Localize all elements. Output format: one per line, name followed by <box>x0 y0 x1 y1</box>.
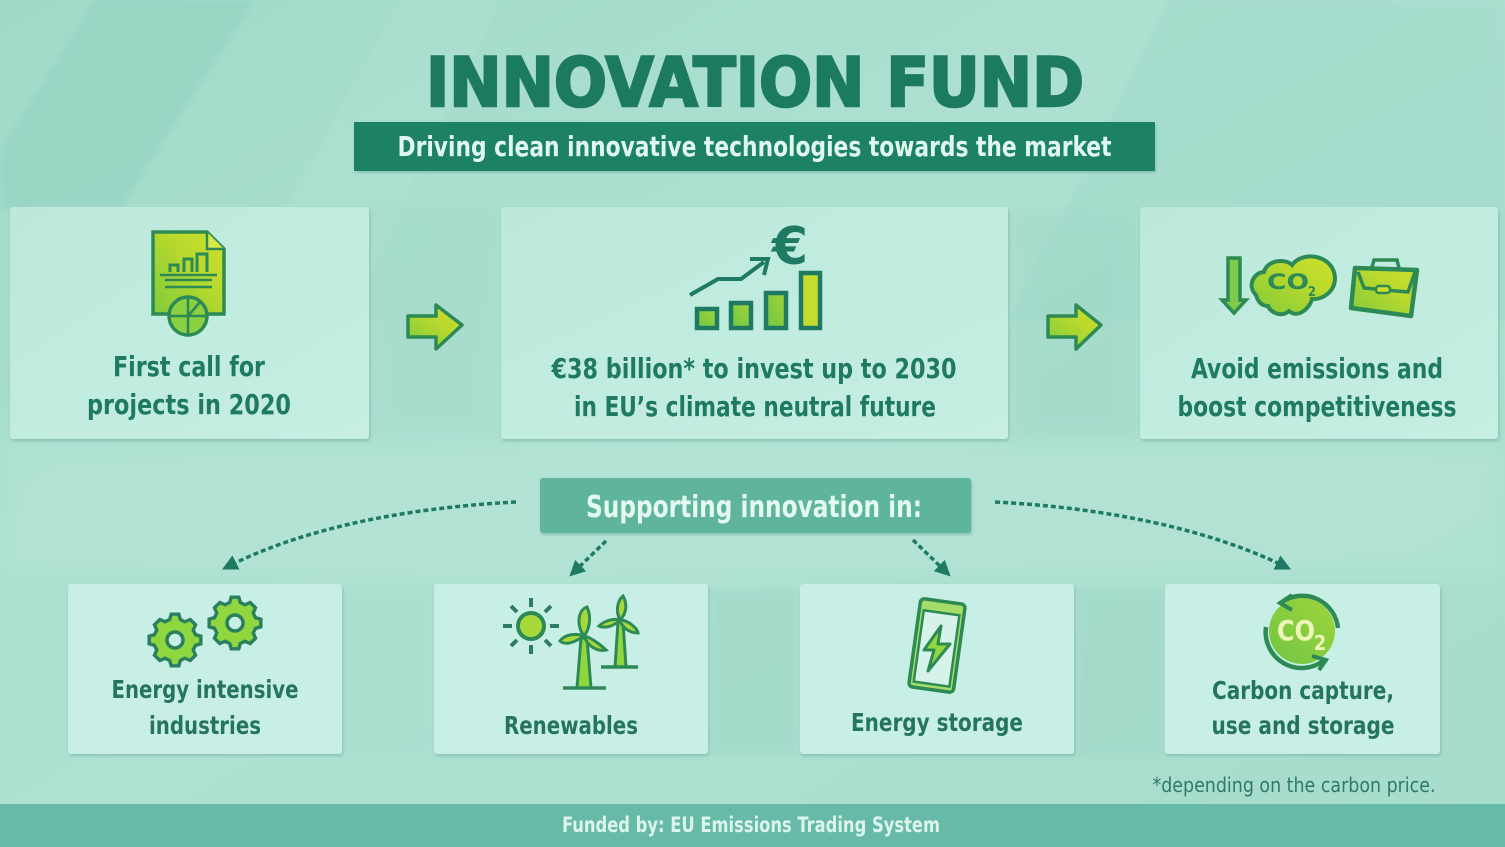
icon: CO2 cycle: 2 <box>1314 631 1326 655</box>
icon: down arrow, CO2 cloud, briefcase: 2 <box>1308 285 1316 300</box>
text: energy storage: Energy storage <box>851 708 1023 737</box>
arrow: to energy storage <box>913 540 945 571</box>
panel: avoid emissions <box>1140 207 1498 439</box>
footer band <box>0 804 1505 847</box>
title: INNOVATION FUND <box>426 44 1084 123</box>
text: in EU’s climate neutral future <box>574 390 936 423</box>
text: first call: First call for <box>113 350 266 383</box>
text: avoid emissions: Avoid emissions and <box>1191 352 1443 385</box>
icon: CO2 cycle: CO <box>1277 614 1315 647</box>
panel: carbon capture <box>1165 584 1440 754</box>
footnote: *depending on the carbon price. <box>1152 773 1436 797</box>
arrow: to renewables <box>575 541 606 571</box>
footer band: Funded by: EU Emissions Trading System <box>562 813 940 837</box>
icon: growth chart with euro <box>690 217 820 328</box>
panel: renewables <box>434 584 708 754</box>
subtitle banner <box>354 122 1155 171</box>
text: carbon capture: Carbon capture, <box>1212 676 1394 705</box>
arrow: to energy intensive industries <box>229 502 516 566</box>
icon: down arrow, CO2 cloud, briefcase: CO <box>1267 270 1309 294</box>
arrow: first to second panel <box>408 305 462 349</box>
icon: phone battery <box>909 598 965 693</box>
icon: document with charts <box>153 232 224 335</box>
subtitle banner: Driving clean innovative technologies towards the market <box>398 130 1112 163</box>
text: renewables: Renewables <box>504 711 638 740</box>
panel: first call for projects <box>10 207 369 439</box>
panel: 38 billion <box>501 207 1008 439</box>
arrow: to carbon capture <box>995 502 1284 566</box>
panel: energy storage <box>800 584 1074 754</box>
icon: growth chart with euro: € <box>771 217 808 277</box>
text: 38 billion: €38 billion* to invest up to 2030 <box>551 352 956 385</box>
icon: gears <box>149 597 261 666</box>
text: use and storage <box>1212 711 1394 740</box>
panel: energy intensive industries <box>68 584 342 754</box>
arrow: second to third panel <box>1048 305 1101 349</box>
icon: sun and wind turbines <box>503 596 638 688</box>
icon: down arrow, CO2 cloud, briefcase <box>1222 256 1417 316</box>
text: industries <box>149 711 261 740</box>
banner: supporting innovation: Supporting innovation in: <box>586 490 922 525</box>
text: energy intensive: Energy intensive <box>112 675 298 704</box>
icon: CO2 cycle <box>1266 595 1338 670</box>
text: boost competitiveness <box>1178 390 1456 423</box>
text: projects in 2020 <box>87 388 291 421</box>
banner: supporting innovation <box>540 478 971 533</box>
